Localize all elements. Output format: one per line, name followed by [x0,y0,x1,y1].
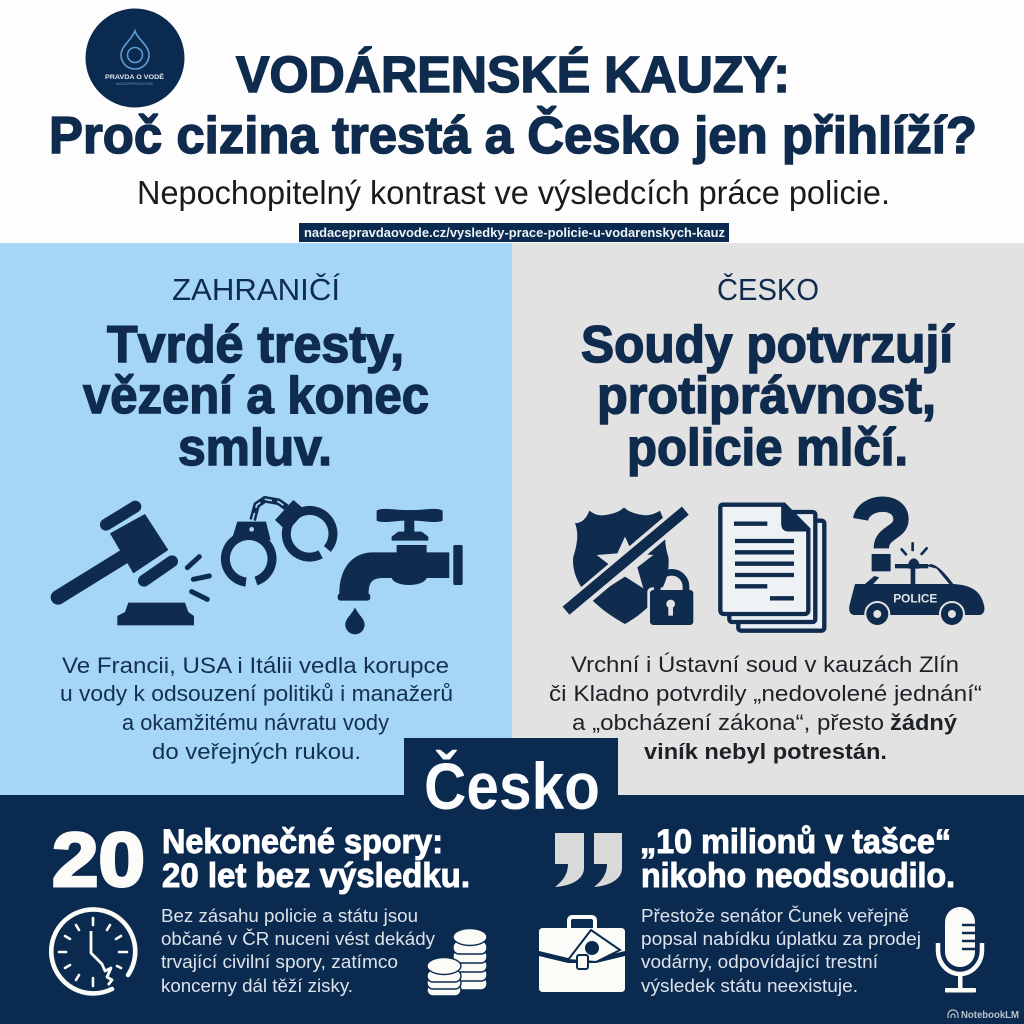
tab: česko: Česko [424,749,600,823]
text: česko description: Vrchní i Ústavní soud v kauzách Zlín [571,652,959,677]
heading: 10 milionů v tašce: nikoho neodsoudilo. [641,857,955,895]
label: zahraničí: ZAHRANIČÍ [172,272,340,307]
icon: faucet [338,509,463,634]
icon: coins [427,928,487,996]
logo: Pravda o vodě: NADACEPRAVDAOVODE [116,82,154,86]
stat: 20: 20 [52,818,145,903]
text: spory description: trvající civilní spory, zatímco [161,951,398,972]
panel: česko [512,243,1024,796]
text: zahraničí description: u vody k odsouzení politiků i manažerů [60,681,453,706]
title [49,46,977,165]
heading: soudy potvrzují [581,316,954,477]
heading: nekonečné spory: 20 let bez výsledku. [162,857,470,895]
text: zahraničí description: a okamžitému návratu vody [122,710,390,735]
text: spory description: občané v ČR nuceni vést dekády [161,928,436,949]
heading: tvrdé tresty: smluv. [178,419,332,477]
text: spory description [161,905,436,996]
heading: 10 milionů v tašce [640,823,955,895]
icon: question mark with police car [849,504,984,626]
heading: tvrdé tresty: vězení a konec [83,367,429,425]
icon: briefcase with money [539,917,625,992]
heading: 10 milionů v tašce: „10 milionů v tašce“ [640,823,951,861]
text: spory description: koncerny dál těží zisky. [161,975,353,996]
heading: soudy potvrzují: Soudy potvrzují [581,316,954,374]
text: zahraničí description: Ve Francii, USA i Itálii vedla korupce [62,653,449,678]
title: VODÁRENSKÉ KAUZY: [236,46,790,103]
icon: cracked clock [51,909,135,993]
text: tašce description: Přestože senátor Čunek veřejně [641,905,909,926]
icon: gavel [58,507,209,625]
text: spory description: Bez zásahu policie a státu jsou [161,905,418,926]
text: zahraničí description [60,653,453,764]
heading: nekonečné spory [162,823,470,895]
icon: stacked documents [720,505,824,631]
panel: header [49,8,977,242]
text: tašce description: výsledek státu neexistuje. [641,975,858,996]
url bar: nadacepravdaovode.cz/vysledky-prace-policie-u-vodarenskych-kauz [304,225,725,240]
heading: nekonečné spory: Nekonečné spory: [162,823,443,861]
icon: handcuffs [225,499,333,582]
icon: crossed badge with lock [566,507,696,627]
text: tašce description: vodárny, odpovídající trestní [641,951,879,972]
label: česko: ČESKO [717,272,819,307]
heading: soudy potvrzují: policie mlčí. [627,419,908,477]
icon: quotation marks [555,833,622,887]
panel: bottom band [0,738,1024,1024]
logo: Pravda o vodě [86,8,184,108]
icon: microphone [938,907,982,992]
logo: Pravda o vodě: PRAVDA O VODĚ [105,72,165,81]
subtitle: Nepochopitelný kontrast ve výsledcích práce policie. [137,174,890,211]
title: Proč cizina trestá a Česko jen přihlíží? [49,106,977,165]
heading: tvrdé tresty: Tvrdé tresty, [107,316,404,374]
watermark: NotebookLM: NotebookLM [961,1009,1019,1021]
text: česko description: či Kladno potvrdily „nedovolené jednání“ [549,681,982,706]
text: česko description: viník nebyl potrestán. [644,739,887,764]
panel: zahraničí [0,243,512,796]
text: česko description: a „obcházení zákona“, přesto [572,710,884,735]
heading: soudy potvrzují: protiprávnost, [597,367,936,425]
text: česko description [549,652,982,764]
text: tašce description [641,905,921,996]
text: česko description: žádný [890,710,958,735]
heading: tvrdé tresty [83,316,429,477]
text: zahraničí description: do veřejných rukou. [152,739,361,764]
icon: question mark with police car: POLICE [893,592,937,606]
text: tašce description: popsal nabídku úplatku za prodej [641,928,921,949]
